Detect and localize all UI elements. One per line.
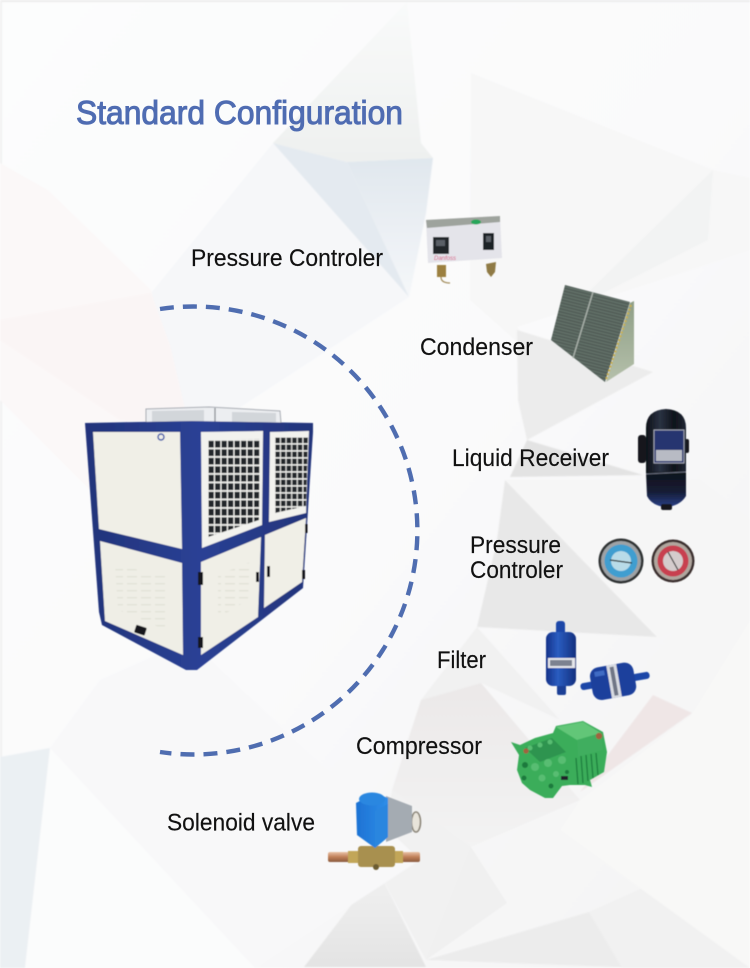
logo on side panel (158, 434, 164, 440)
gauge: high pressure (652, 540, 694, 582)
icon: compressor (511, 721, 607, 798)
icon: condenser coil (551, 285, 634, 382)
label: condenser: Condenser (420, 334, 533, 361)
icon: filter driers (546, 621, 652, 703)
icon: solenoid valve (328, 792, 420, 870)
panel: left side lower (100, 541, 183, 655)
icon: liquid receiver tank (638, 409, 689, 510)
filter: horizontal (578, 659, 652, 703)
label: pressure controler: Pressure Controler (191, 245, 383, 272)
label: liquid receiver: Liquid Receiver (452, 445, 609, 472)
blue frame (85, 421, 313, 670)
label: compressor: Compressor (356, 733, 482, 760)
illustration: condensing unit (85, 407, 313, 670)
gauge: low pressure (598, 538, 644, 584)
label: pressure controler, two lines (470, 532, 563, 584)
panel: front grille right (269, 431, 309, 522)
label: filter: Filter (437, 647, 486, 674)
fan guards on top (146, 407, 281, 423)
label: solenoid valve: Solenoid valve (167, 810, 315, 836)
panel: front grille left (201, 431, 263, 548)
title: Standard Configuration (76, 94, 403, 131)
dashed arc around unit (160, 306, 417, 754)
panel: left side upper (93, 432, 182, 549)
icon: pressure control switch: Danfoss (434, 256, 456, 262)
filter: vertical (546, 621, 576, 695)
panel: door left (198, 537, 261, 655)
icon: pressure gauges (598, 538, 694, 584)
icon: pressure control switch (426, 216, 502, 283)
label: pressure controler, two lines: Controler (470, 557, 563, 584)
label: pressure controler, two lines: Pressure (470, 532, 561, 559)
panel: door right (264, 518, 308, 608)
